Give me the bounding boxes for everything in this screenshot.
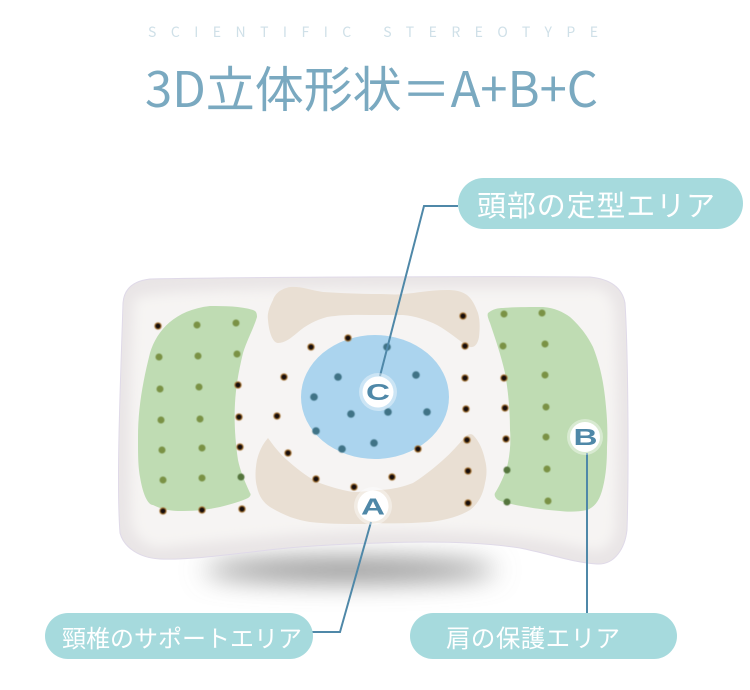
marker C: C: [366, 379, 390, 405]
label: head area: 頭部の定型エリア: [477, 183, 715, 225]
marker C: [359, 373, 397, 411]
subtitle: SCIENTIFIC STEREOTYPE: [148, 22, 598, 42]
pillow diagram: [118, 277, 628, 564]
holes on green zones: [156, 310, 552, 506]
holes on blue zone: [310, 343, 431, 453]
ventilation holes: [155, 310, 552, 514]
holes on bare foam: [155, 313, 509, 514]
marker A: [354, 487, 392, 525]
marker A: A: [361, 494, 385, 520]
zone: left shoulder green: [138, 306, 257, 511]
zone: top tan: [268, 287, 480, 347]
zone: right shoulder green: [488, 307, 607, 512]
label: head area: [458, 178, 743, 229]
marker B: B: [574, 424, 598, 450]
connector: head label to C: [380, 206, 458, 376]
label: neck support area: 頸椎のサポートエリア: [62, 619, 302, 654]
title: 3D立体形状＝A+B+C: [145, 51, 598, 122]
zone: bottom tan: [256, 434, 486, 524]
pillow body: [118, 277, 628, 564]
label: shoulder protection area: [410, 613, 677, 659]
label: shoulder protection area: 肩の保護エリア: [446, 620, 620, 655]
label: neck support area: [45, 613, 313, 659]
marker B: [567, 419, 603, 455]
shadow under pillow: [204, 559, 496, 581]
zone: center blue: [301, 335, 449, 459]
connector: neck label to A: [312, 522, 371, 632]
connector: shoulder label to B: [586, 453, 588, 613]
